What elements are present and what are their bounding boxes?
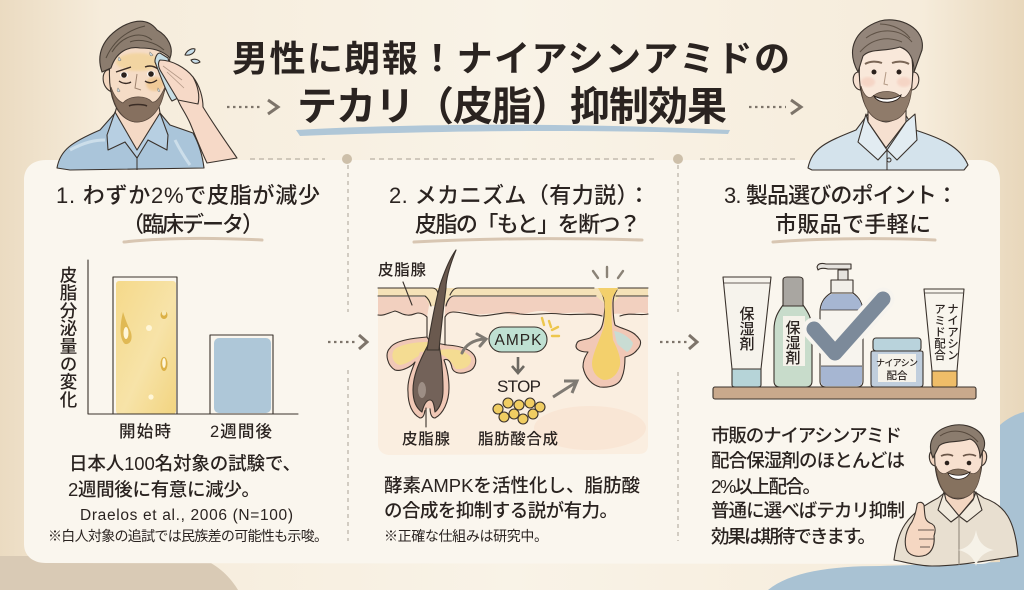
y axis label: 皮脂分泌量の変化 — [58, 266, 78, 408]
main panel — [24, 160, 1000, 564]
title line 2: テカリ（皮脂）抑制効果 — [297, 85, 727, 129]
heading 2 — [389, 183, 650, 242]
jar: 配合 — [886, 369, 908, 382]
axes — [88, 260, 298, 414]
tube left: 湿 — [739, 321, 755, 338]
panel: clinical data — [48, 183, 328, 544]
heading 3: 市販品で手軽に — [775, 212, 931, 237]
heading 2: 皮脂の「もと」を断つ？ — [415, 212, 641, 237]
text block: product: 効果は期待できます。 — [711, 526, 876, 547]
arrow: column 2 to column 3 — [660, 335, 697, 349]
hair bulb — [413, 345, 443, 412]
heading 3 — [724, 183, 958, 242]
text block: result: 日本人100名対象の試験で、 — [69, 453, 301, 474]
sweat beads — [117, 52, 160, 92]
gland fill left — [392, 342, 430, 365]
arrow: title left — [227, 100, 278, 114]
sebum rays — [593, 267, 623, 278]
text block: product: 普通に選べばテカリ抑制 — [711, 500, 905, 521]
tube left — [723, 277, 771, 387]
arrow: title right — [749, 100, 801, 114]
ears — [853, 72, 919, 90]
jar: ナイアシン — [876, 358, 918, 368]
tube right: ナイアシン — [946, 303, 958, 360]
beard — [111, 87, 165, 122]
title — [232, 38, 790, 136]
thumbs up hand — [905, 502, 935, 556]
collar — [858, 114, 917, 160]
title line 1: 男性に朗報！ナイアシンアミドの — [232, 38, 790, 79]
bottle green: 剤 — [785, 350, 801, 367]
hair — [100, 21, 171, 72]
spark — [542, 318, 559, 336]
hair shaft — [427, 250, 456, 350]
AMPK pill: AMPK — [494, 332, 542, 349]
towel — [155, 53, 178, 101]
product shelf — [713, 263, 976, 399]
text block: product — [711, 425, 905, 547]
stop label: STOP — [497, 377, 541, 396]
top dashed decoration — [250, 154, 795, 164]
title underline brush — [296, 125, 730, 136]
arrow to AMPK — [462, 334, 486, 353]
eyes and brows — [120, 72, 128, 78]
surface band — [378, 288, 648, 306]
face — [859, 44, 913, 122]
x labels: 開始時 — [119, 422, 171, 441]
dermis background — [378, 296, 648, 455]
skin diagram — [378, 250, 648, 455]
shelf — [713, 387, 976, 399]
text block: product: 市販のナイアシンアミド — [711, 425, 902, 446]
face — [935, 435, 982, 499]
bar: start — [113, 277, 177, 414]
citation: Draelos et al., 2006 (N=100) — [80, 507, 293, 524]
illustration: man with thumbs up — [894, 425, 1018, 566]
eyes and brows — [945, 461, 949, 465]
footnote 1: ※白人対象の追試では民族差の可能性も示唆。 — [48, 528, 328, 544]
heading 1: （臨床データ） — [122, 212, 264, 237]
left gland and follicle pink shell — [387, 337, 476, 418]
label gland top: 皮脂腺 — [378, 261, 426, 279]
beard — [861, 86, 912, 121]
heading 3: 3. 製品選びのポイント： — [724, 183, 958, 208]
illustration: smiling man top right — [808, 20, 968, 170]
jar — [871, 338, 923, 387]
sparkle — [958, 530, 994, 566]
bar: after 2 weeks — [210, 335, 273, 414]
collar — [107, 112, 168, 158]
follicle walls — [427, 317, 445, 345]
gland fill right — [440, 349, 471, 369]
check mark — [814, 299, 883, 353]
hair — [853, 20, 922, 72]
inner follicle white gap — [412, 350, 444, 412]
neck — [868, 108, 906, 148]
shirt — [57, 113, 204, 170]
tube left: 剤 — [739, 336, 755, 353]
bottle green: 保 — [785, 320, 801, 337]
tube left: 保 — [739, 306, 755, 323]
arrow up right — [553, 381, 577, 397]
smile — [874, 95, 901, 102]
panel: product choice — [711, 183, 976, 547]
pink skin band — [378, 297, 648, 317]
text block: product: 2%以上配合。 — [711, 476, 821, 497]
text block: result — [68, 453, 301, 500]
label gland bottom: 皮脂腺 — [402, 430, 450, 448]
hand — [158, 60, 199, 104]
eyes and brows — [872, 70, 876, 74]
hair — [931, 425, 985, 458]
bottle green: 湿 — [785, 335, 801, 352]
text block: mechanism: 酵素AMPKを活性化し、脂肪酸 — [384, 475, 640, 496]
column dividers — [348, 165, 678, 541]
text block: mechanism: の合成を抑制する説が有力。 — [384, 500, 618, 521]
panel: mechanism — [378, 183, 650, 544]
fatty acid cluster — [493, 398, 545, 424]
smile — [948, 472, 970, 479]
tube right — [924, 289, 964, 387]
neck — [945, 488, 974, 516]
heading 1 — [56, 183, 320, 242]
leader lines — [403, 282, 426, 427]
heading 1: 1. わずか2%で皮脂が減少 — [56, 183, 320, 208]
collar — [938, 492, 982, 522]
arrow: column 1 to column 2 — [328, 335, 367, 349]
text block: product: 配合保湿剤のほとんどは — [711, 450, 905, 471]
tube right: アミド配合 — [933, 303, 946, 361]
neck — [115, 100, 160, 158]
ears — [929, 450, 987, 466]
beard — [936, 466, 981, 498]
sweat drops — [185, 49, 200, 63]
bottle green — [774, 277, 812, 387]
bar chart — [58, 260, 298, 441]
arm — [178, 77, 237, 163]
heading 2: 2. メカニズム（有力説）： — [389, 183, 650, 208]
AMPK pill — [489, 327, 547, 352]
footnote 2: ※正確な仕組みは研究中。 — [384, 528, 548, 544]
right follicle — [576, 290, 641, 387]
text block: result: 2週間後に有意に減少。 — [68, 479, 260, 500]
text block: mechanism — [384, 475, 640, 521]
shirt — [894, 490, 1018, 566]
pump bottle — [817, 263, 863, 387]
illustration: worried man wiping face — [57, 21, 237, 170]
arrow down — [512, 357, 524, 373]
label fatty acid synthesis: 脂肪酸合成 — [478, 430, 558, 448]
ear — [103, 70, 112, 92]
bar chart: 2週間後 — [210, 422, 272, 441]
face — [109, 46, 170, 122]
shirt — [808, 114, 968, 170]
